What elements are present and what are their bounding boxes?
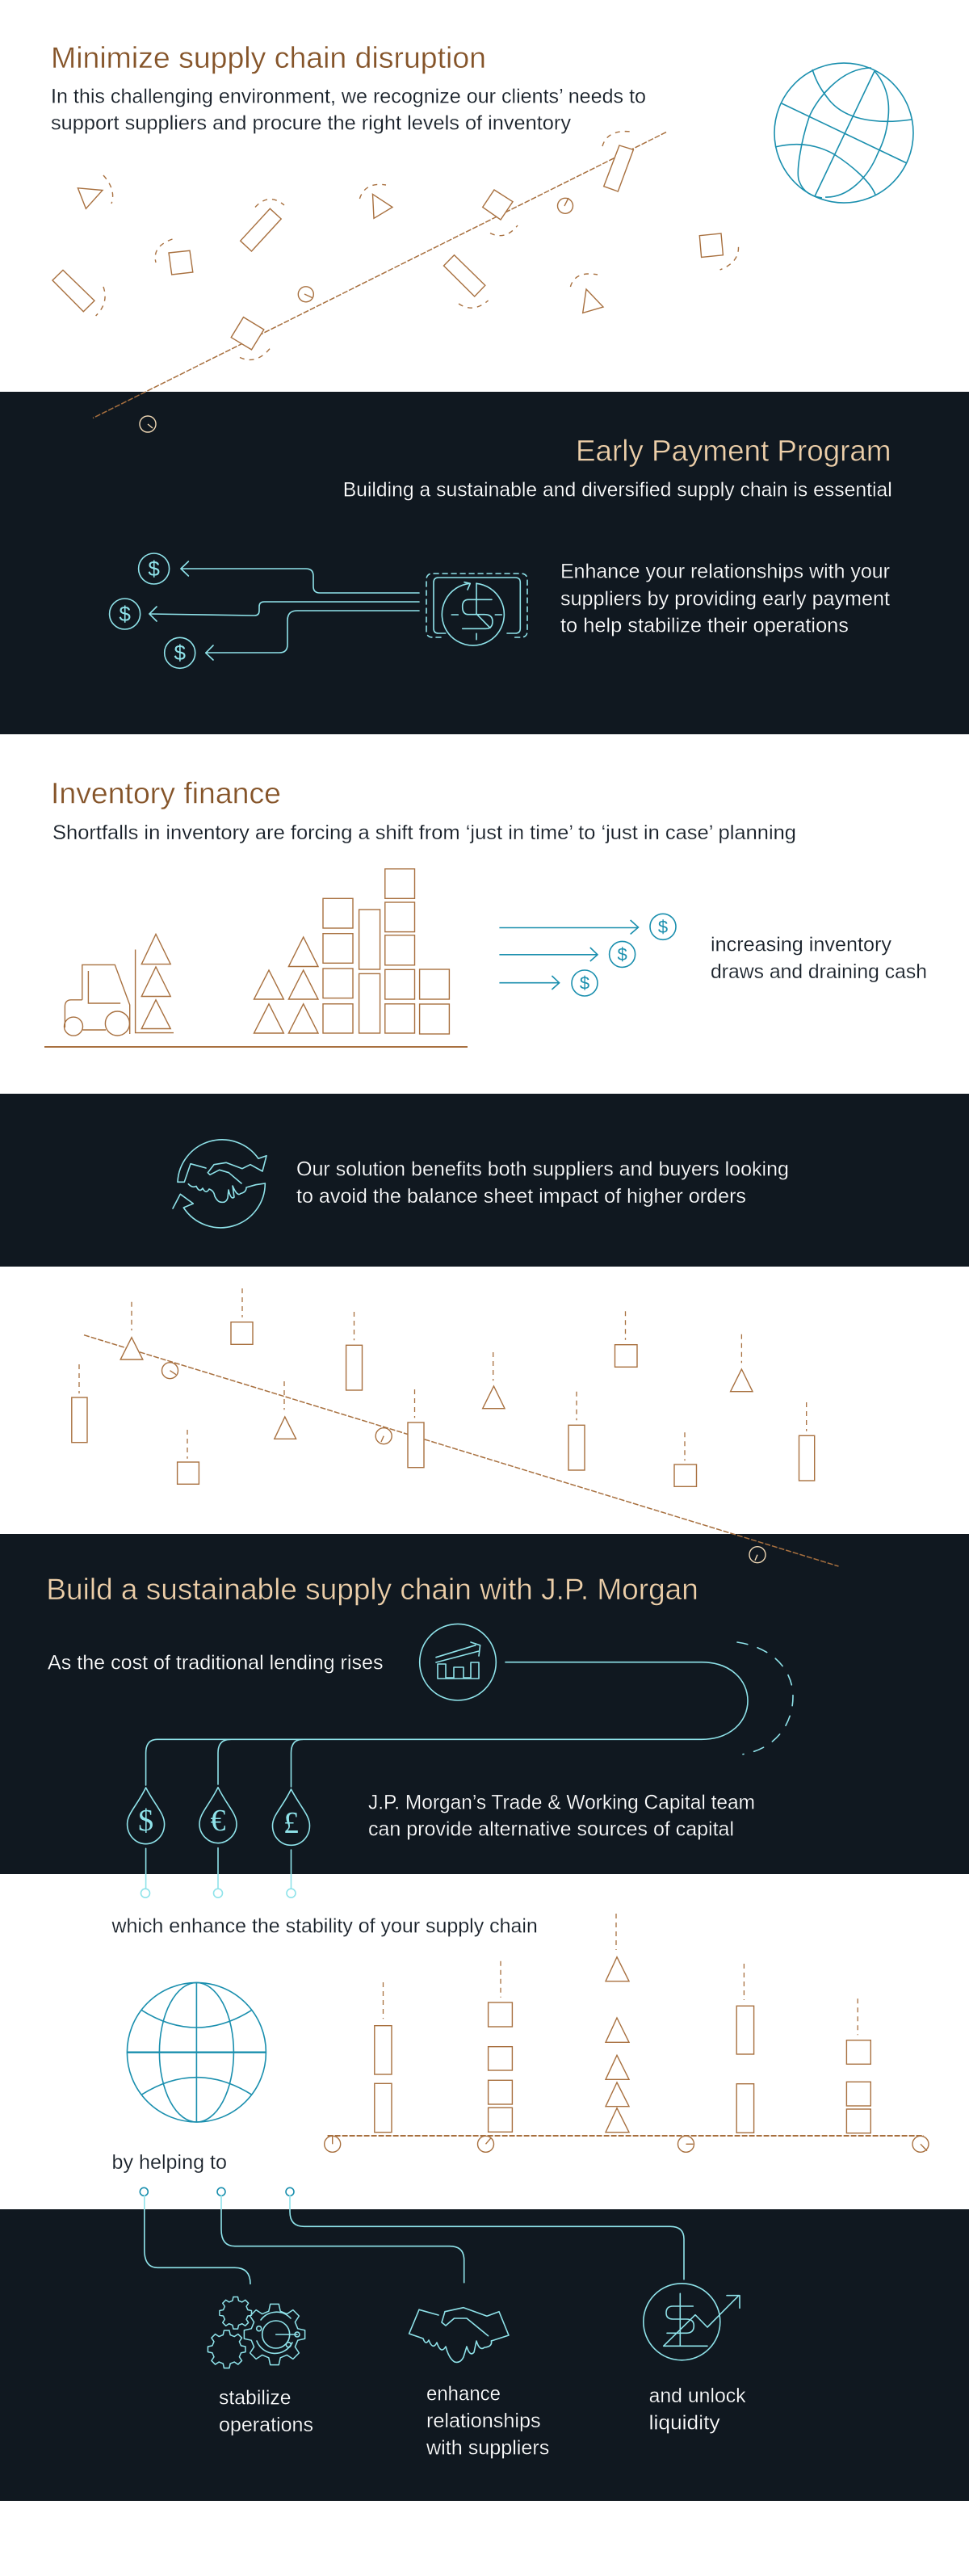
ground line [44, 1046, 468, 1048]
conveyor dashed line [93, 132, 666, 418]
text block: unlock: liquidity [649, 2411, 720, 2434]
text block: enhance: with suppliers [426, 2436, 549, 2459]
text block: stabilize [219, 2387, 313, 2436]
text block: relationships: to help stabilize their operations [560, 615, 849, 637]
connector: three outcome lines [145, 2196, 684, 2284]
panel: solution band [173, 1140, 789, 1228]
chart: inventory stacks [254, 869, 449, 1034]
heading: inventory finance: Inventory finance [51, 777, 281, 809]
icon: forklift with triangles [65, 934, 174, 1036]
text block: relationships [560, 561, 890, 637]
text block: cost of lending: As the cost of traditional lending rises [48, 1652, 383, 1675]
text block: stabilize: stabilize [219, 2387, 291, 2410]
floating boxes and triangles [52, 132, 739, 359]
icon: central payment [426, 574, 527, 645]
text block: alternative capital: can provide alternative sources of capital [368, 1818, 734, 1841]
panel: early payment background [0, 392, 969, 734]
icon: handshake large [409, 2308, 509, 2362]
text block: by helping to: by helping to [111, 2151, 227, 2174]
connector: lending line to branches [146, 1642, 793, 1787]
text block: draining cash: increasing inventory [711, 934, 891, 956]
clocks on conveyor [162, 1363, 766, 1563]
icon: teal dollar coins: $ [617, 944, 627, 964]
text block: solution: to avoid the balance sheet impact of higher orders [296, 1185, 746, 1208]
panel: stability [111, 1914, 929, 2196]
text block: draining cash [711, 934, 927, 983]
text block: draining cash: draws and draining cash [711, 960, 927, 983]
icon: teal dollar coins: $ [658, 917, 668, 937]
icon: gears [208, 2297, 305, 2368]
icon: handshake cycle [173, 1140, 266, 1228]
icon: dollar coins [110, 553, 195, 668]
clocks on conveyor [140, 198, 573, 432]
panel: early payment program [110, 435, 892, 668]
panel: minimize disruption [51, 41, 913, 432]
text block: relationships: Enhance your relationships with your [560, 561, 890, 583]
text block: stabilize: operations [219, 2414, 313, 2436]
icon: teal dollar coins [572, 914, 676, 996]
icon: currency drops [128, 1788, 310, 1845]
text block: alternative capital [368, 1791, 755, 1841]
panel: build sustainable chain background [0, 1534, 969, 1874]
connector: drops to nodes [141, 1848, 296, 1897]
text block: intro: support suppliers and procure the right levels of inventory [51, 111, 571, 134]
text block: solution: Our solution benefits both suppliers and buyers looking [296, 1158, 789, 1180]
conveyor: level line [328, 2135, 924, 2137]
icon: currency drops: $ [138, 1804, 153, 1838]
icon: dollar coins: $ [174, 641, 186, 665]
icon: currency drops: € [210, 1804, 226, 1838]
text block: unlock: and unlock [649, 2385, 746, 2407]
heading: early payment: Early Payment Program [576, 435, 891, 468]
heading: minimize: Minimize supply chain disruption [51, 41, 486, 74]
clocks on level line [325, 2136, 929, 2152]
text block: enhance: enhance [426, 2383, 501, 2406]
chart: stable stacks [375, 1914, 870, 2133]
panel: descending conveyor [72, 1288, 839, 1566]
icon: teal dollar coins: $ [580, 973, 589, 994]
falling rectangles and triangles [72, 1288, 815, 1486]
icon: dollar coins: $ [148, 557, 160, 581]
text block: stability: which enhance the stability of your supply chain [111, 1915, 538, 1938]
icon: currency drops: £ [283, 1806, 299, 1840]
conveyor dashed line [84, 1335, 838, 1566]
icon: dollar coins: $ [119, 602, 131, 626]
panel: solution band background [0, 1094, 969, 1267]
panel: outcomes [145, 2196, 746, 2459]
text block: shortfalls: Shortfalls in inventory are forcing a shift from ‘just in time’ to ‘just in case’ planning [52, 822, 796, 844]
icon: rising chart [420, 1624, 496, 1700]
text block: intro: In this challenging environment, we recognize our clients’ needs to [51, 86, 646, 108]
text block: unlock [649, 2385, 746, 2434]
icon: liquidity [644, 2284, 740, 2360]
text block: relationships: suppliers by providing early payment [560, 587, 890, 610]
text block: enhance [426, 2383, 549, 2459]
panel: outcomes background [0, 2209, 969, 2501]
panel: inventory finance [44, 777, 927, 1047]
nodes [140, 2187, 294, 2196]
panel: build a sustainable supply chain [46, 1573, 793, 1897]
text block: enhance: relationships [426, 2410, 541, 2432]
text block: intro [51, 86, 646, 134]
text block: sub heading: Building a sustainable and diversified supply chain is essential [343, 478, 892, 501]
arrows: payments to suppliers [149, 561, 419, 660]
icon: globe [127, 1982, 266, 2122]
text block: alternative capital: J.P. Morgan’s Trade & Working Capital team [368, 1791, 755, 1813]
icon: tilted globe [774, 63, 913, 203]
arrows: cash draining [499, 920, 638, 990]
heading: build: Build a sustainable supply chain with J.P. Morgan [46, 1573, 698, 1606]
text block: solution [296, 1158, 789, 1208]
